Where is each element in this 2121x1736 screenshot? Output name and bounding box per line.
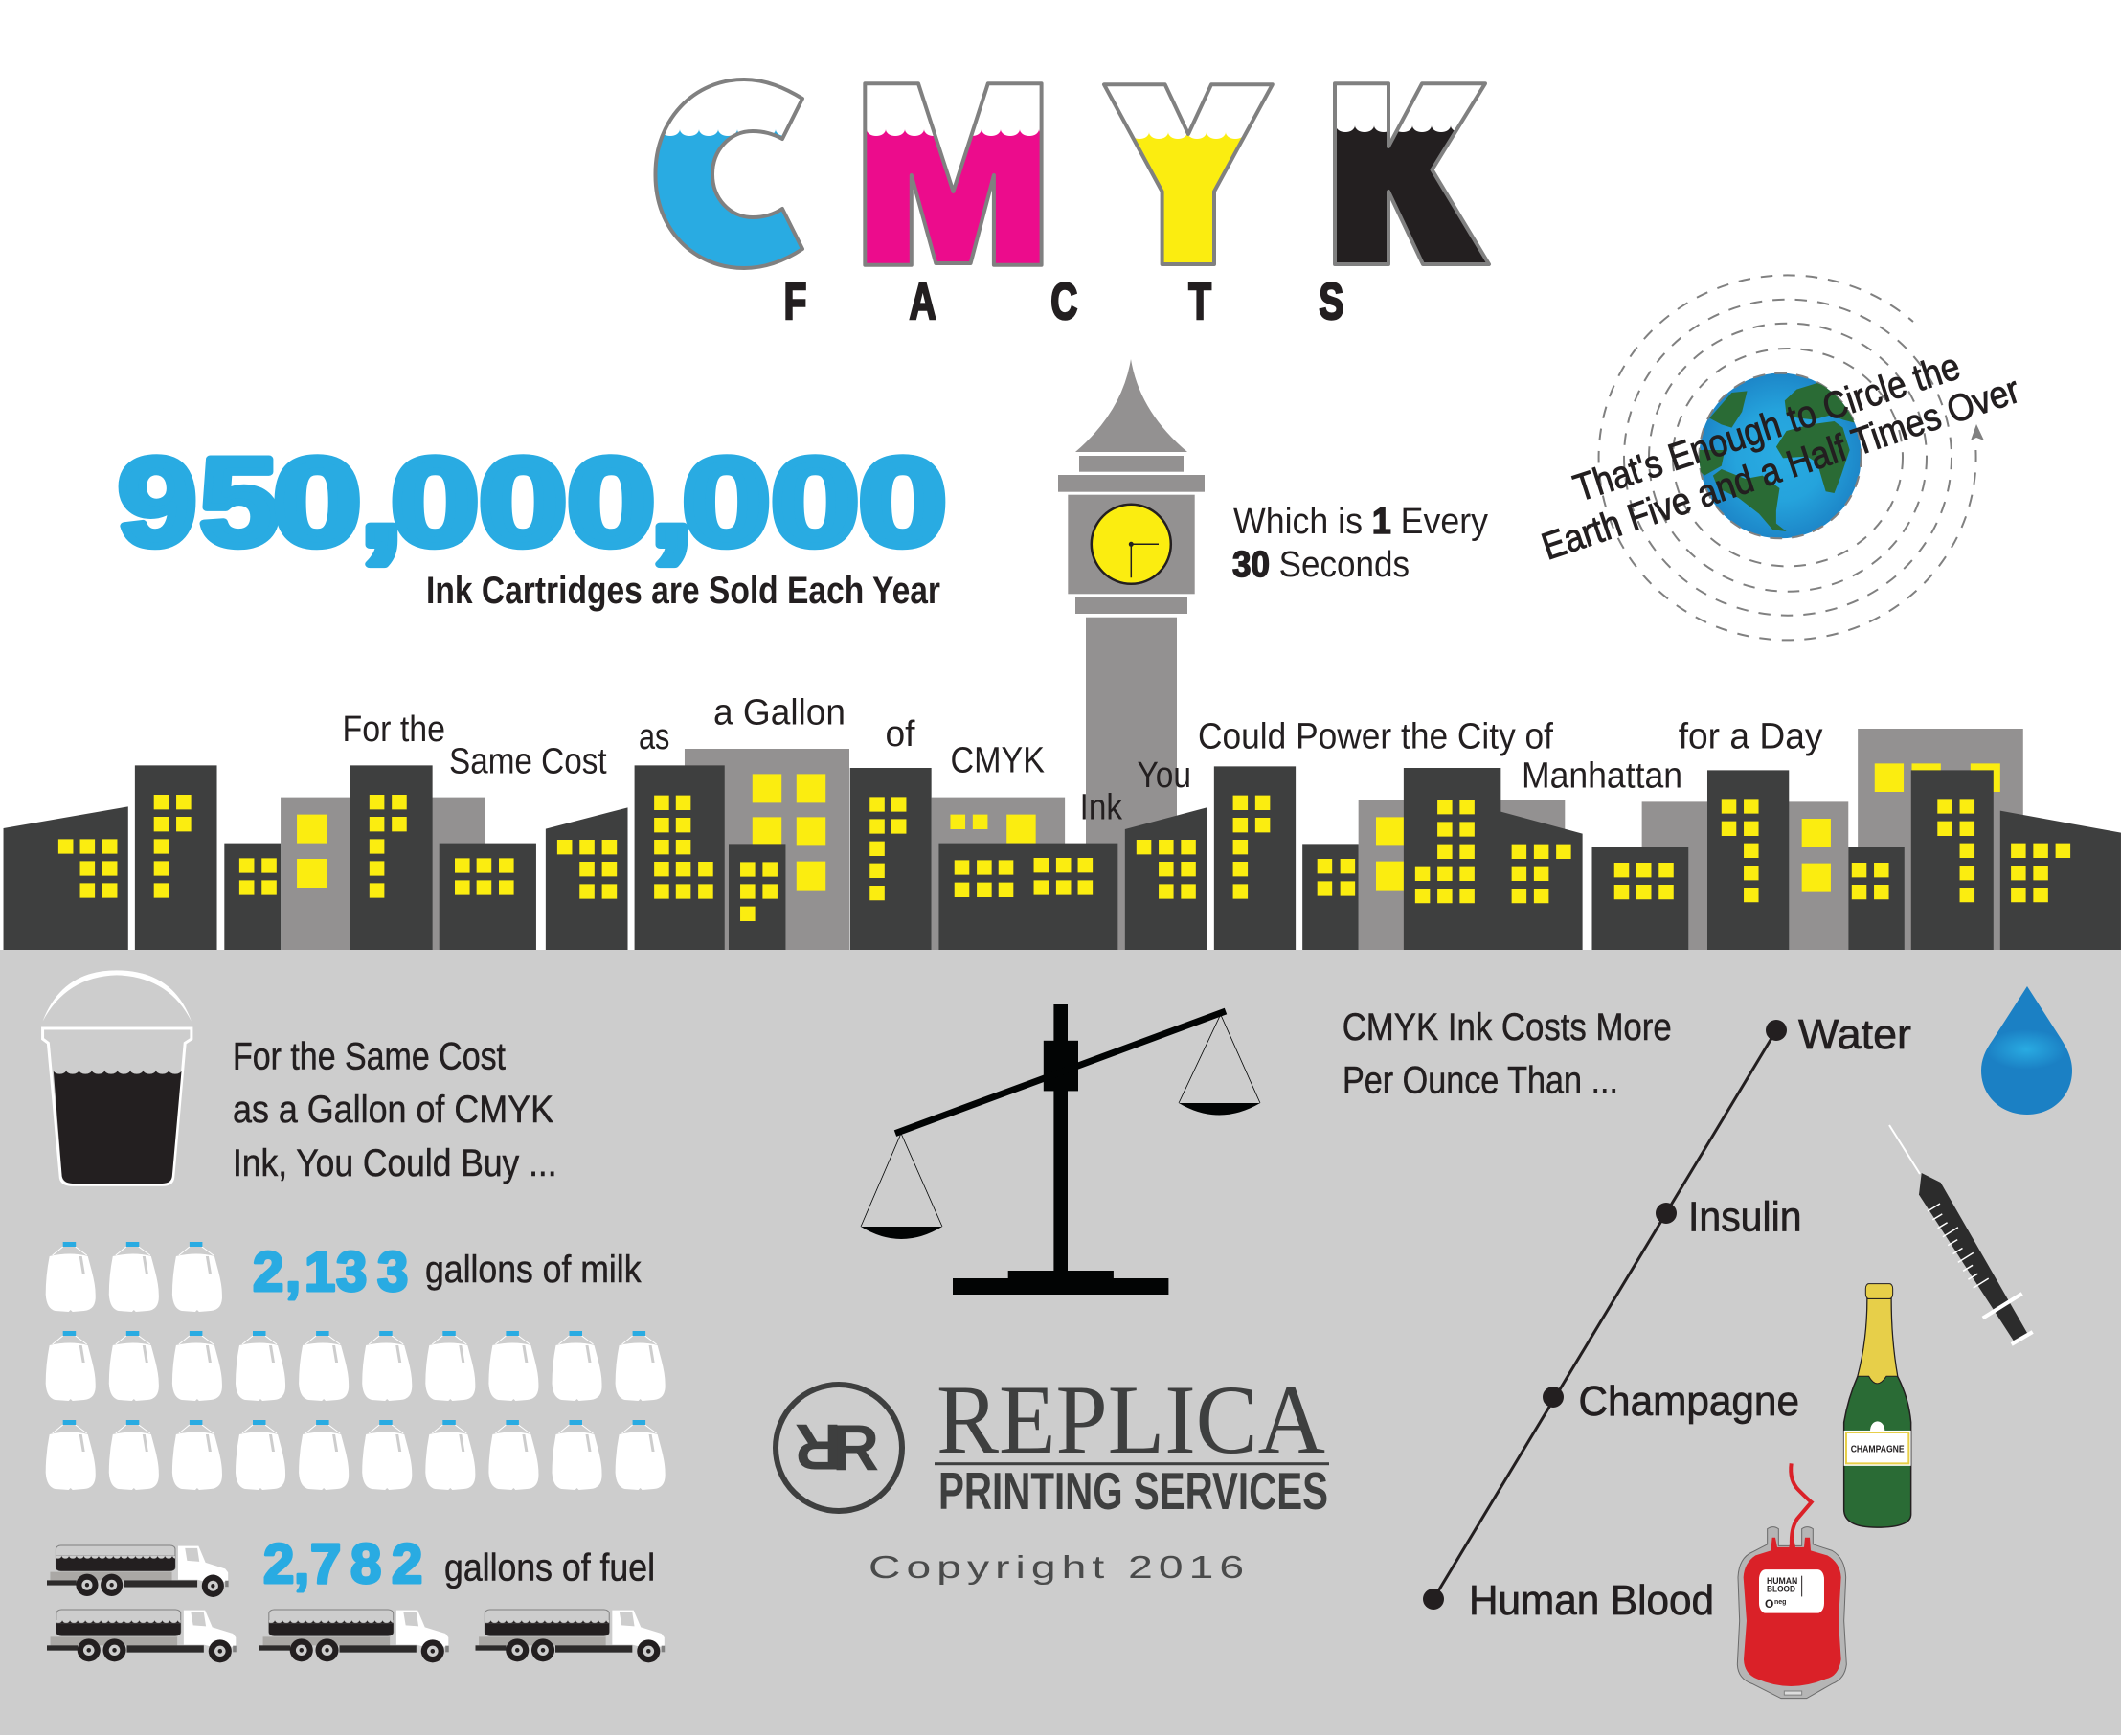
bag label text — [1765, 1576, 1797, 1611]
price timeline — [1423, 1011, 1911, 1624]
text: for the same cost: For the Same Cost — [233, 1036, 506, 1078]
bag label text: O — [1765, 1597, 1773, 1611]
milk jugs row 2 — [46, 1331, 666, 1401]
fuel stat label: gallons of fuel — [444, 1547, 655, 1589]
icon: blood bag — [1737, 1463, 1846, 1699]
logo mark: R — [795, 1410, 842, 1483]
orbit rings — [1599, 275, 1976, 640]
timeline labels: Champagne — [1578, 1378, 1799, 1425]
logo mark: R — [832, 1411, 879, 1484]
bag label text: HUMAN — [1767, 1576, 1797, 1586]
skyline caption words: as — [639, 717, 669, 757]
letter M — [862, 83, 1044, 268]
skyline background buildings, left — [281, 749, 1065, 950]
rotated text: Earth Five and a Half Times Over — [1537, 369, 2025, 569]
skyline caption words: for a Day — [1679, 717, 1823, 757]
bag label text: BLOOD — [1767, 1584, 1795, 1593]
skyline caption words: of — [885, 714, 915, 755]
milk stat number: 2,133 — [253, 1241, 408, 1303]
skyline caption words — [343, 693, 1823, 828]
logo mark — [776, 1385, 902, 1511]
skyline caption words: Manhattan — [1522, 756, 1682, 797]
tanker truck 1 — [47, 1545, 229, 1597]
skyline caption words: CMYK — [950, 741, 1045, 781]
text: costs more per ounce: CMYK Ink Costs More — [1343, 1006, 1672, 1048]
skyline caption words: Ink — [1080, 788, 1123, 828]
skyline caption words: a Gallon — [713, 693, 846, 733]
clock tower — [1058, 359, 1205, 951]
text: costs more per ounce — [1343, 1006, 1672, 1102]
rotated text: That's Enough to Circle the — [1568, 346, 1965, 510]
skyline caption words: Same Cost — [449, 742, 607, 782]
icon: champagne bottle — [1844, 1284, 1911, 1527]
icon: ink bucket — [43, 970, 192, 1184]
text: for the same cost: Ink, You Could Buy ... — [233, 1142, 557, 1184]
skyline foreground buildings, left — [4, 765, 1117, 950]
skyline background buildings, right — [1359, 729, 2023, 950]
text: for the same cost: as a Gallon of CMYK — [233, 1089, 553, 1131]
earth with dashed orbit rings — [1537, 275, 2025, 640]
timeline dots — [1423, 1020, 1787, 1610]
big number: 950,000,000: 0,000,000 — [273, 432, 947, 572]
logo tagline: PRINTING SERVICES — [938, 1461, 1328, 1521]
text: which is 1 every 30 seconds: 30 Seconds — [1232, 545, 1410, 585]
icon: balance scale — [861, 1004, 1260, 1295]
timeline labels — [1469, 1011, 1911, 1624]
bag label text: neg — [1774, 1599, 1786, 1606]
icon: water drop — [1981, 986, 2072, 1115]
bottle label text: CHAMPAGNE — [1851, 1444, 1905, 1455]
tanker truck 4 — [475, 1610, 665, 1662]
ground panel — [0, 950, 2121, 1735]
timeline labels: Insulin — [1688, 1193, 1802, 1241]
text: which is 1 every 30 seconds: Which is 1 Every — [1233, 502, 1488, 542]
subtitle: FACTS: FACTS — [784, 272, 1343, 329]
big number: 950,000,000: 95 — [118, 432, 279, 572]
milk stat label: gallons of milk — [425, 1249, 642, 1291]
tanker truck 2 — [47, 1610, 237, 1662]
tanker truck 3 — [259, 1610, 449, 1662]
milk jugs row 1 — [46, 1242, 222, 1312]
skyline caption words: Could Power the City of — [1198, 717, 1553, 757]
text: costs more per ounce: Per Ounce Than ... — [1343, 1060, 1618, 1102]
icon: syringe — [1889, 1125, 2033, 1344]
text: which is 1 every 30 seconds — [1232, 502, 1488, 585]
logo: Replica Printing Services — [776, 1365, 1329, 1521]
letter K — [1331, 83, 1494, 269]
letter C — [651, 79, 809, 273]
logo wordmark: REPLICA — [936, 1365, 1325, 1475]
text: for the same cost — [233, 1036, 557, 1184]
fuel stat number: 2,782 — [263, 1533, 422, 1595]
text: ink cartridges sold: Ink Cartridges are Sold Each Year — [426, 570, 940, 612]
clock face — [1092, 505, 1171, 584]
globe — [1694, 373, 1862, 538]
title: CMYK ink-filled letters — [651, 79, 1494, 273]
skyline foreground buildings, right — [1125, 766, 2121, 950]
skyline caption words: For the — [343, 710, 445, 750]
milk jugs row 3 — [46, 1420, 666, 1490]
timeline labels: Water — [1798, 1011, 1911, 1058]
skyline caption words: You — [1138, 755, 1191, 796]
orbit arrowhead — [1971, 424, 1984, 440]
copyright: Copyright 2016 — [869, 1549, 1244, 1585]
letter Y — [1101, 84, 1274, 268]
timeline labels: Human Blood — [1469, 1577, 1714, 1624]
